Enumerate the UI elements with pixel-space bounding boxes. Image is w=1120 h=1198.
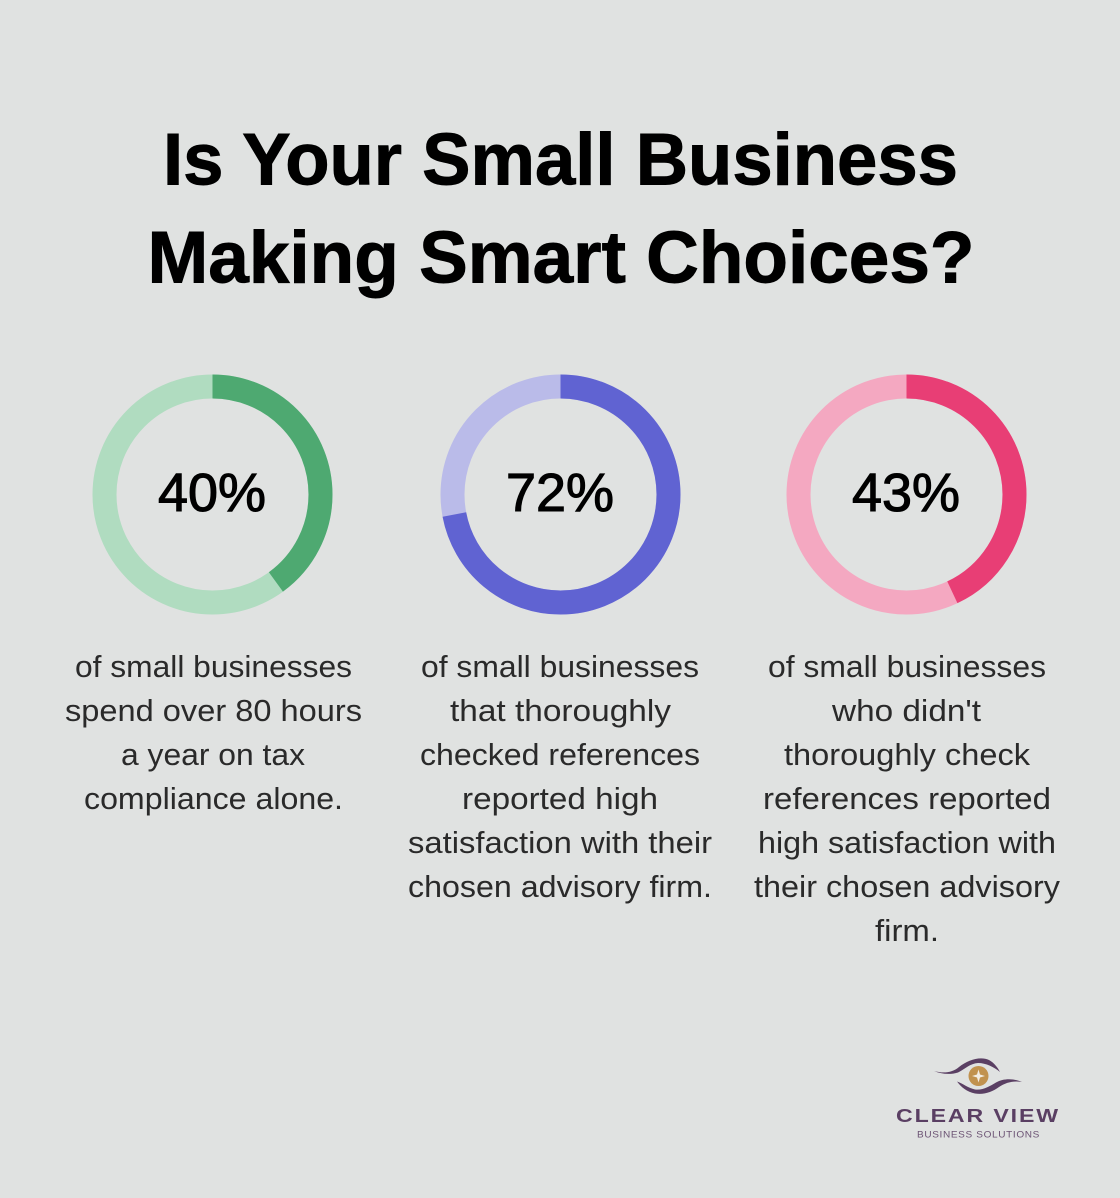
description: checked references: chosen advisory firm.: [408, 869, 712, 904]
description: checked references: reported high: [462, 781, 658, 816]
description: checked references: satisfaction with their: [408, 825, 712, 860]
description: did not check references: [754, 649, 1061, 948]
title: Is Your Small Business: [163, 120, 958, 200]
description: did not check references: references reported: [763, 781, 1051, 816]
description: tax compliance: spend over 80 hours: [65, 693, 362, 728]
donut chart: 43%: [798, 386, 1014, 602]
description: tax compliance: a year on tax: [121, 737, 306, 772]
panel: 72% statistic: [408, 386, 712, 904]
description: checked references: of small businesses: [421, 649, 699, 684]
donut chart: 72%: [452, 386, 668, 602]
panel: 43% statistic: [754, 386, 1061, 948]
description: tax compliance: compliance alone.: [84, 781, 343, 816]
description: did not check references: their chosen advisory: [754, 869, 1061, 904]
logo: Clear View Business Solutions: [896, 1058, 1060, 1140]
description: tax compliance: of small businesses: [75, 649, 352, 684]
description: did not check references: of small businesses: [768, 649, 1046, 684]
description: did not check references: who didn't: [831, 693, 981, 728]
title: [148, 120, 974, 298]
logo wordmark: CLEAR VIEW: [896, 1105, 1060, 1126]
description: checked references: checked references: [420, 737, 700, 772]
description: checked references: that thoroughly: [450, 693, 672, 728]
description: did not check references: thoroughly check: [784, 737, 1031, 772]
value: 43%: 43%: [852, 463, 960, 523]
description: did not check references: firm.: [875, 913, 939, 948]
description: tax compliance: [65, 649, 362, 816]
donut chart: 40%: [104, 386, 320, 602]
description: checked references: [408, 649, 712, 904]
title: Making Smart Choices?: [148, 218, 974, 298]
logo tagline: BUSINESS SOLUTIONS: [917, 1130, 1040, 1140]
value: 72%: 72%: [506, 463, 614, 523]
icon: eye with star: [934, 1058, 1022, 1094]
panel: 40% statistic: [65, 386, 362, 816]
value: 40%: 40%: [158, 463, 266, 523]
description: did not check references: high satisfaction with: [758, 825, 1056, 860]
